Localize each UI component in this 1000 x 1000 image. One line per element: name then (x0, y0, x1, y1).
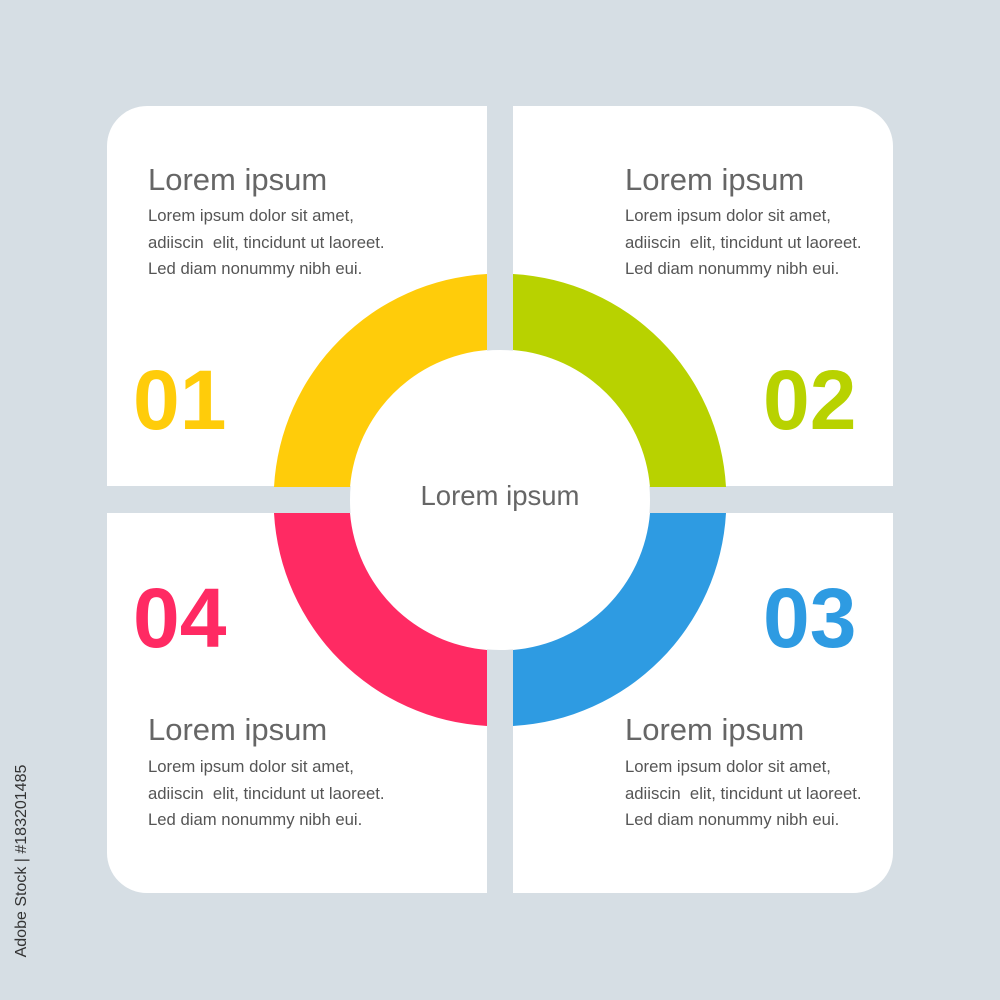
text 3: Lorem ipsum dolor sit amet, (625, 757, 831, 776)
heading 4: Lorem ipsum (148, 712, 327, 747)
text 2: Led diam nonummy nibh eui. (625, 259, 839, 278)
text 4 (148, 757, 385, 829)
text 1: adiiscin elit, tincidunt ut laoreet. (148, 232, 385, 252)
text 3: Led diam nonummy nibh eui. (625, 810, 839, 829)
number 02: 02 (763, 353, 856, 447)
text 3: adiiscin elit, tincidunt ut laoreet. (625, 784, 862, 802)
watermark: Adobe Stock | #183201485 (13, 765, 30, 957)
text 2 (625, 206, 862, 278)
number 03: 03 (763, 571, 856, 665)
heading 2: Lorem ipsum (625, 162, 804, 197)
panel: bottom-right (513, 513, 893, 893)
text 2: Lorem ipsum dolor sit amet, (625, 206, 831, 225)
number 01: 01 (133, 353, 226, 447)
panel: top-left (107, 106, 487, 486)
text 1 (148, 206, 385, 278)
panel: bottom-left (107, 513, 487, 893)
text 1: Led diam nonummy nibh eui. (148, 259, 362, 278)
heading 1: Lorem ipsum (148, 162, 327, 197)
panel: top-right (513, 106, 893, 486)
center label: Lorem ipsum (421, 480, 579, 511)
text 2: adiiscin elit, tincidunt ut laoreet. (625, 232, 862, 252)
text 4: Lorem ipsum dolor sit amet, (148, 757, 354, 776)
text 4: adiiscin elit, tincidunt ut laoreet. (148, 784, 385, 802)
heading 3: Lorem ipsum (625, 712, 804, 747)
text 4: Led diam nonummy nibh eui. (148, 810, 362, 829)
number 04: 04 (133, 571, 226, 665)
text 1: Lorem ipsum dolor sit amet, (148, 206, 354, 225)
text 3 (625, 757, 862, 829)
